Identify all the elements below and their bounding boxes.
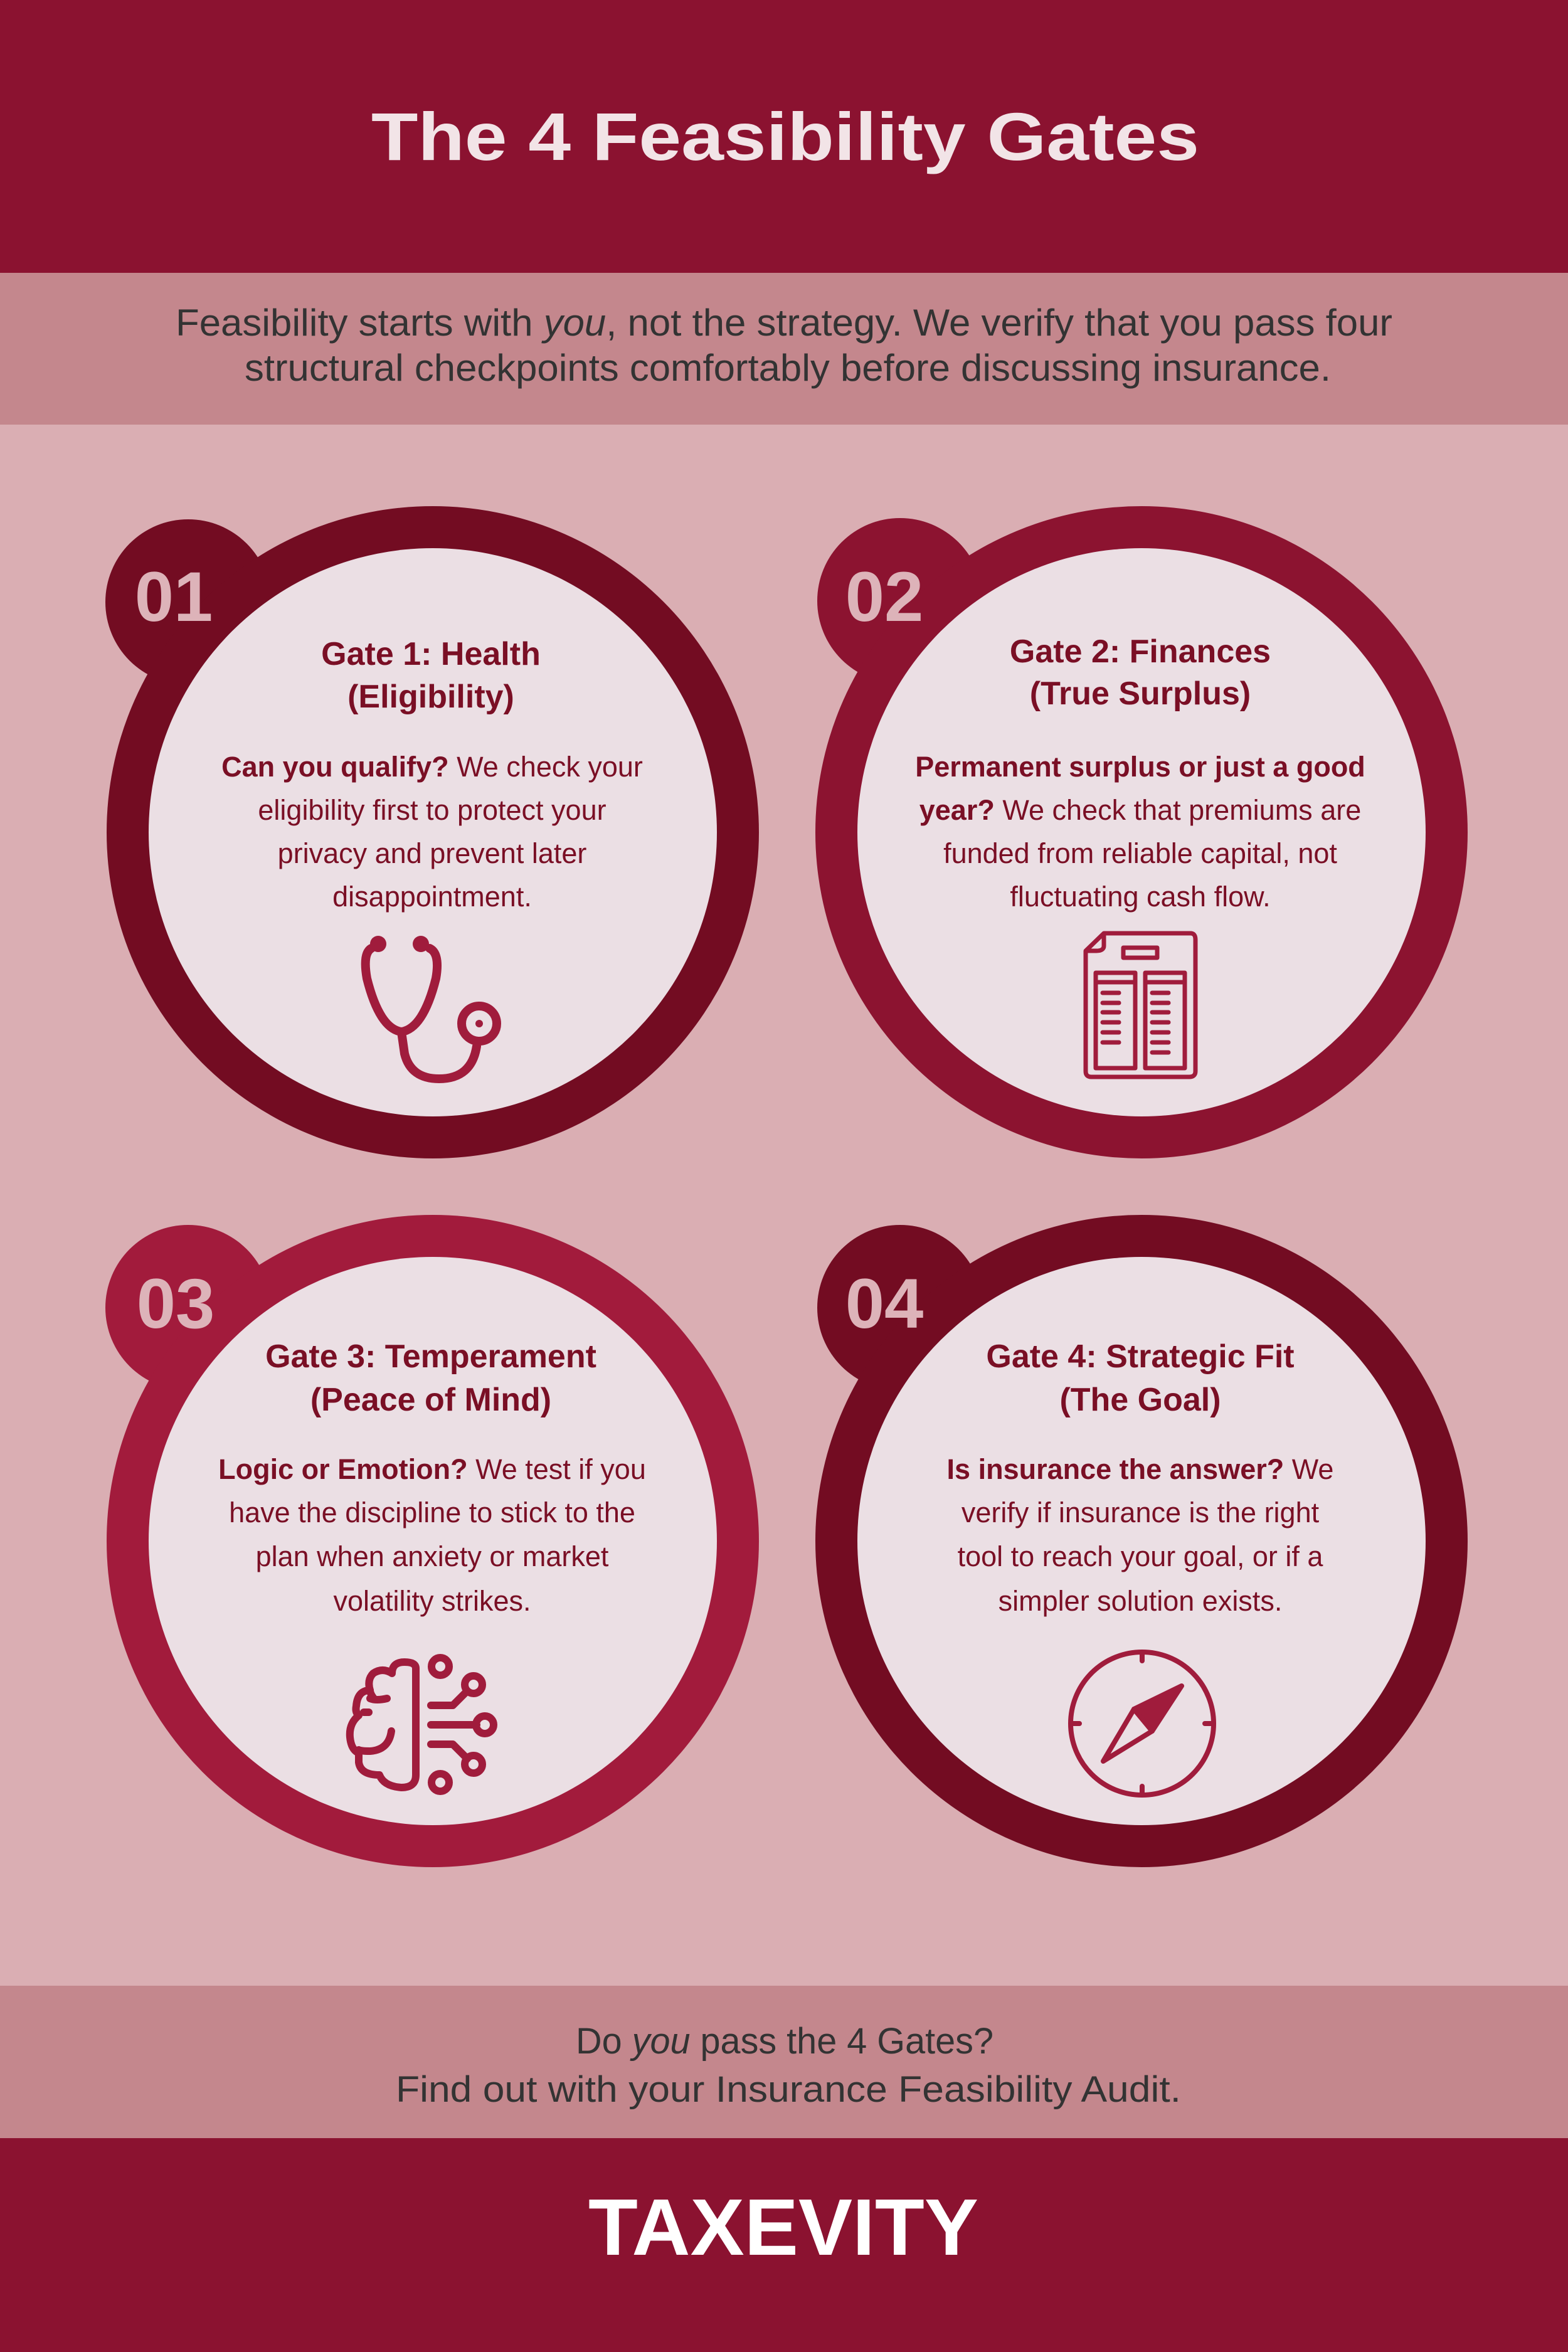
gate 2 body: Permanent surplus or just a good [915,751,1365,783]
gate 1 body: eligibility first to protect your [258,794,607,826]
gate 2 body: year? We check that premiums are [919,794,1361,826]
header band [0,0,1568,273]
gate 4 body: verify if insurance is the right [961,1496,1320,1528]
number 02: 02 [845,558,923,636]
gate 1 heading: Gate 1: Health [321,636,541,672]
intro band [0,273,1568,425]
panel: gate 2 [815,506,1468,1158]
intro text: Feasibility starts with you, not the strategy. We verify that you pass four [176,302,1370,344]
gate 2 body: fluctuating cash flow. [1010,881,1271,913]
footer call to action: Do you pass the 4 Gates? [576,2021,995,2062]
footer call to action [0,1986,1568,2138]
gate 1 body: disappointment. [332,881,532,913]
icon: financial document [1086,933,1195,1077]
gate 2 body: funded from reliable capital, not [943,837,1337,869]
gate 1 body: privacy and prevent later [278,837,586,869]
intro text: structural checkpoints comfortably before discussing insurance. [245,347,1331,389]
gate 1 body: Can you qualify? We check your [221,751,643,783]
gate 4 heading: (The Goal) [1059,1382,1221,1418]
icon: stethoscope [366,936,497,1079]
gate 4 body: tool to reach your goal, or if a [958,1540,1323,1572]
panel: gate 3 [105,1215,759,1867]
gate 3 heading: (Peace of Mind) [310,1382,551,1418]
gate 4 body: simpler solution exists. [999,1585,1282,1617]
number 01: 01 [135,558,213,636]
panel: gate 4 [815,1215,1468,1867]
gate 3 heading: Gate 3: Temperament [265,1338,596,1375]
gate 2 heading: (True Surplus) [1030,675,1251,712]
icon: brain circuit [350,1658,494,1791]
gate 3 body: have the discipline to stick to the [229,1496,635,1528]
gate 4 body: Is insurance the answer? We [947,1453,1333,1485]
footer call to action: Find out with your Insurance Feasibility Audit. [396,2069,1181,2110]
gate 2 heading: Gate 2: Finances [1010,633,1271,670]
title: The 4 Feasibility Gates [371,98,1199,174]
number 03: 03 [137,1264,215,1343]
gate 3 body: Logic or Emotion? We test if you [218,1453,646,1485]
gate 3 body: plan when anxiety or market [256,1540,609,1572]
icon: compass [1071,1652,1214,1795]
panel: gate 1 [105,506,759,1158]
logo TAXEVITY: TAXEVITY [588,2183,978,2272]
gate 4 heading: Gate 4: Strategic Fit [986,1338,1295,1375]
main background [0,425,1568,1986]
gate 1 heading: (Eligibility) [347,679,514,715]
brand footer [0,2138,1568,2352]
number 04: 04 [845,1264,923,1343]
gate 3 body: volatility strikes. [333,1585,531,1617]
